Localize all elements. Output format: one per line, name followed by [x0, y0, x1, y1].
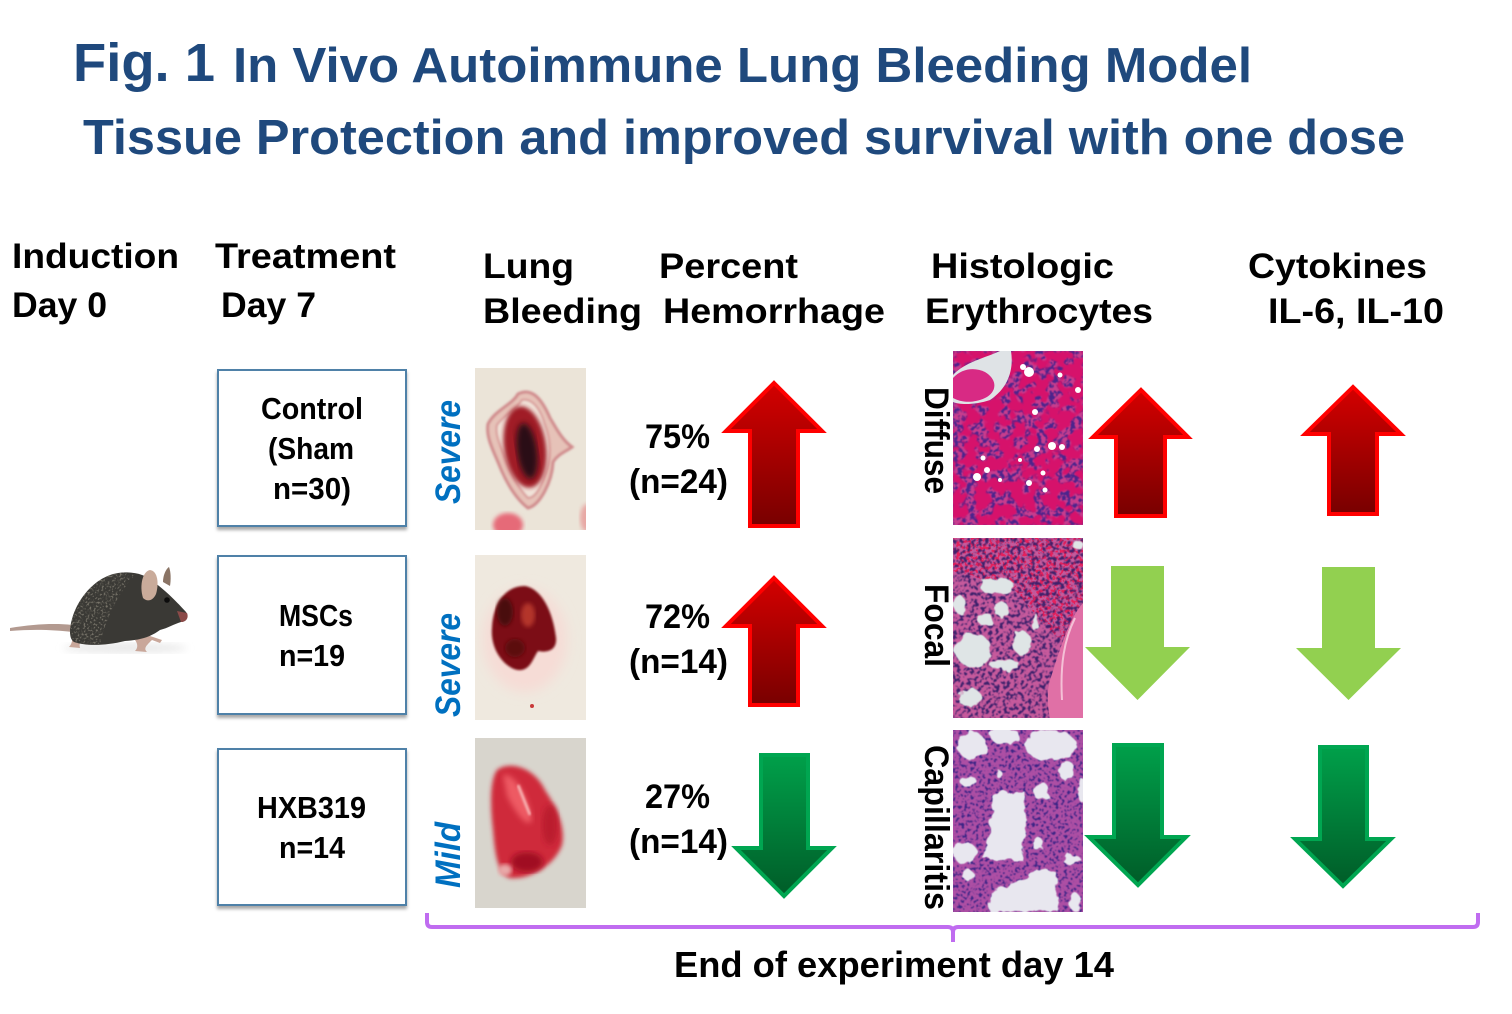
- title line 1: In Vivo Autoimmune Lung Bleeding Model: [233, 39, 1252, 93]
- arrow: hemorrhage up MSCs: [726, 578, 822, 705]
- title: [73, 33, 1405, 165]
- caption: end of experiment: End of experiment day 14: [674, 944, 1114, 985]
- heading: histologic erythrocytes: Erythrocytes: [925, 292, 1153, 331]
- arrow: cytokines down HXB319: [1295, 747, 1391, 886]
- arrow: hemorrhage up control: [726, 383, 822, 526]
- box: control: [218, 370, 406, 526]
- value: 75 percent: 75%: [645, 418, 710, 456]
- value: 27 percent: [629, 778, 728, 861]
- arrow: hemorrhage down HXB319: [736, 755, 832, 896]
- title line 1 label: Fig. 1: [73, 33, 215, 93]
- arrow: erythrocytes down HXB319: [1089, 745, 1186, 885]
- box: MSCs: [218, 556, 406, 714]
- heading: treatment: Treatment: [215, 237, 396, 276]
- heading: induction: Day 0: [12, 286, 107, 325]
- value: 72 percent: (n=14): [629, 643, 728, 681]
- label: diffuse: Diffuse: [917, 387, 955, 494]
- heading: histologic erythrocytes: Histologic: [931, 247, 1114, 286]
- box: MSCs: MSCs: [279, 598, 353, 633]
- label: severe: Severe: [429, 613, 468, 717]
- heading: cytokines: IL-6, IL-10: [1268, 292, 1444, 331]
- photo: control lung: [475, 368, 586, 530]
- box: HXB319: n=14: [279, 830, 346, 865]
- photo: MSC lung: [475, 555, 586, 720]
- bracket: day 14 span: [427, 913, 1478, 942]
- histology: diffuse: [953, 351, 1083, 525]
- box: control: (Sham: [268, 431, 354, 466]
- box: control: Control: [261, 391, 363, 426]
- label: mild: Mild: [429, 821, 468, 888]
- value: 27 percent: (n=14): [629, 823, 728, 861]
- box: control: n=30): [273, 471, 351, 506]
- box: MSCs: n=19: [279, 638, 345, 673]
- value: 75 percent: (n=24): [629, 463, 728, 501]
- icon: mouse: [10, 567, 188, 653]
- histology: focal: [953, 538, 1083, 718]
- label: capillaritis: Capillaritis: [917, 745, 955, 910]
- label: severe: Severe: [429, 400, 468, 504]
- value: 72 percent: [629, 598, 728, 681]
- arrow: cytokines up control: [1305, 387, 1401, 514]
- heading: lung bleeding: Bleeding: [483, 292, 642, 331]
- box: HXB319: HXB319: [257, 790, 366, 825]
- label: focal: Focal: [917, 584, 955, 667]
- value: 75 percent: [629, 418, 728, 501]
- value: 27 percent: 27%: [645, 778, 710, 816]
- arrow: cytokines down MSCs: [1296, 567, 1401, 700]
- heading: lung bleeding: Lung: [483, 247, 574, 286]
- arrow: erythrocytes down MSCs: [1085, 566, 1190, 700]
- photo: HXB319 lung: [475, 738, 586, 908]
- heading: percent hemorrhage: Percent: [659, 247, 798, 286]
- heading: percent hemorrhage: Hemorrhage: [663, 292, 885, 331]
- title line 2: Tissue Protection and improved survival with one dose: [83, 111, 1405, 165]
- heading: treatment: Day 7: [221, 286, 316, 325]
- box: HXB319: [218, 749, 406, 905]
- heading: cytokines: Cytokines: [1248, 247, 1427, 286]
- histology: capillaritis: [953, 728, 1087, 912]
- arrow: erythrocytes up control: [1093, 390, 1188, 516]
- heading: induction: Induction: [12, 237, 179, 276]
- value: 72 percent: 72%: [645, 598, 710, 636]
